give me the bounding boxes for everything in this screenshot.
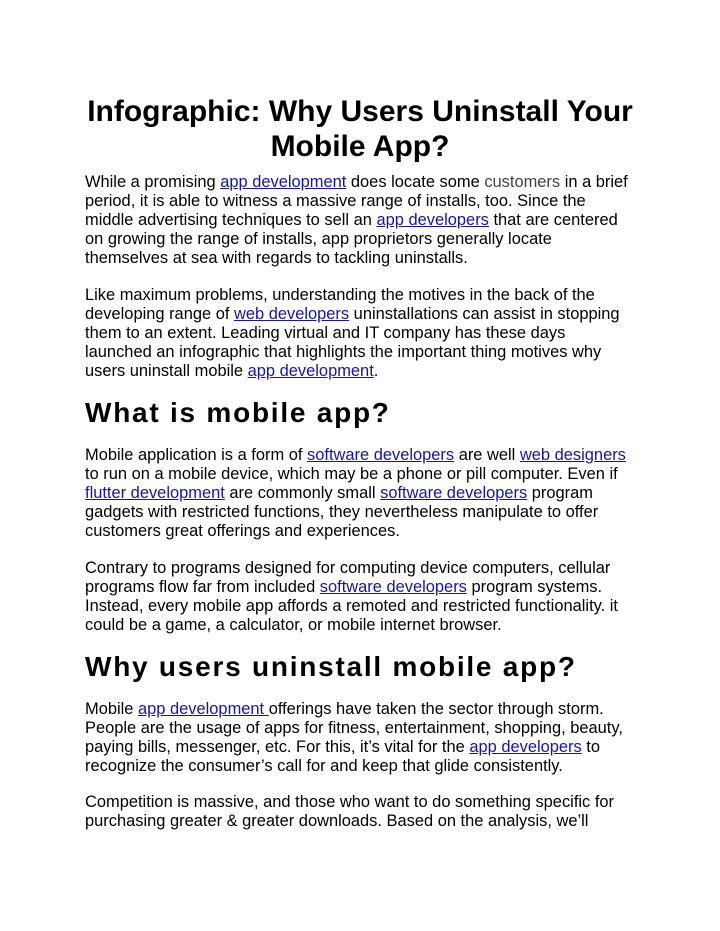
text block: intro paragraph 2 <box>85 286 620 380</box>
title <box>87 95 633 163</box>
text block: uninstall paragraph 1: recognize the consumer’s call for and keep that glide consistently. <box>85 757 563 775</box>
text block: uninstall paragraph 1: People are the usage of apps for fitness, entertainment, shopping, beauty, <box>85 719 623 737</box>
text block: definition paragraph 2: programs flow far from included software developers program systems. <box>85 578 602 596</box>
text block: uninstall paragraph 2: purchasing greater & greater downloads. Based on the analysis, we’ll <box>85 812 588 830</box>
text block: intro paragraph 2: them to an extent. Leading virtual and IT company has these days <box>85 324 565 342</box>
heading: why users uninstall: Why users uninstall mobile app? <box>85 651 577 682</box>
text block: uninstall paragraph 2 <box>85 793 614 830</box>
text block: definition paragraph 1: Mobile application is a form of software developers are well web designers <box>85 446 626 464</box>
text block: definition paragraph 2: could be a game, a calculator, or mobile internet browser. <box>85 616 502 634</box>
text block: definition paragraph 2: Instead, every mobile app affords a remoted and restricted functionality. it <box>85 597 618 615</box>
text block: definition paragraph 1: to run on a mobile device, which may be a phone or pill computer. Even if <box>85 465 618 483</box>
text block: uninstall paragraph 2: Competition is massive, and those who want to do something specific for <box>85 793 614 811</box>
text block: definition paragraph 1 <box>85 446 626 540</box>
text block: intro paragraph 1: While a promising app development does locate some customers in a brief <box>85 173 628 191</box>
title: Mobile App? <box>271 130 449 163</box>
text block: intro paragraph 2: users uninstall mobile app development. <box>85 362 378 380</box>
text block: intro paragraph 1: on growing the range of installs, app proprietors generally locate <box>85 230 552 248</box>
text block: definition paragraph 2 <box>85 559 618 634</box>
text block: definition paragraph 1: gadgets with restricted functions, they nevertheless manipulate to offer <box>85 503 598 521</box>
text block: intro paragraph 1: themselves at sea with regards to tackling uninstalls. <box>85 249 468 267</box>
text block: uninstall paragraph 1 <box>85 700 623 775</box>
title: Infographic: Why Users Uninstall Your <box>87 95 633 128</box>
text block: definition paragraph 1: flutter development are commonly small software developers program <box>85 484 593 502</box>
text block: intro paragraph 1 <box>85 173 628 267</box>
text block: intro paragraph 1: middle advertising techniques to sell an app developers that are centered <box>85 211 618 229</box>
text block: uninstall paragraph 1: Mobile app development offerings have taken the sector through storm. <box>85 700 604 718</box>
text block: definition paragraph 2: Contrary to programs designed for computing device computers, cellular <box>85 559 610 577</box>
text block: intro paragraph 2: developing range of web developers uninstallations can assist in stopping <box>85 305 620 323</box>
text block: intro paragraph 2: launched an infographic that highlights the important thing motives why <box>85 343 601 361</box>
text block: intro paragraph 2: Like maximum problems, understanding the motives in the back of the <box>85 286 595 304</box>
text block: uninstall paragraph 1: paying bills, messenger, etc. For this, it’s vital for the app developers to <box>85 738 600 756</box>
heading: what is mobile app: What is mobile app? <box>85 397 391 428</box>
text block: intro paragraph 1: period, it is able to witness a massive range of installs, too. Since the <box>85 192 586 210</box>
text block: definition paragraph 1: customers great offerings and experiences. <box>85 522 400 540</box>
